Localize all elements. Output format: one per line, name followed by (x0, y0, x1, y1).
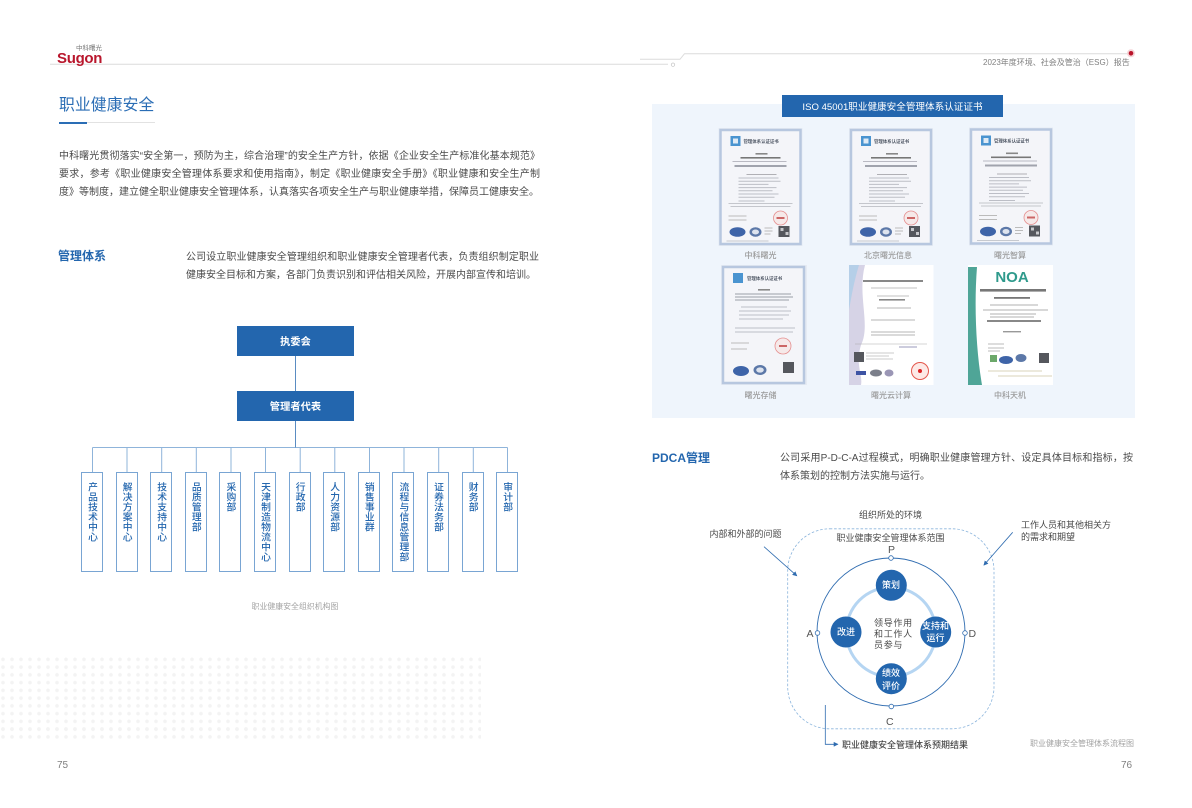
cert: 曙光云计算 (849, 265, 934, 385)
intro text (59, 150, 540, 198)
diagram labels: 和工作人 (874, 628, 913, 638)
panel: certificates: 曙光云计算 (871, 391, 911, 400)
cert labels: 中科曙光 (744, 251, 776, 260)
department boxes: 审计部 (501, 482, 512, 512)
box: 执委会 (237, 326, 354, 356)
department boxes (81, 472, 518, 572)
department boxes: 技术支持中心 (155, 482, 166, 542)
cert: 曙光存储 (721, 265, 807, 385)
diagram labels: 内部和外部的问题 (710, 529, 782, 539)
diagram labels: 领导作用 (874, 618, 913, 628)
cert: 曙光智算: 管理体系认证证书 (994, 138, 1030, 144)
diagram labels: 员参与 (874, 640, 903, 650)
cert labels: 北京曙光信息 (864, 251, 912, 260)
cert: 北京曙光信息 (849, 128, 933, 246)
diagram labels: 的需求和期望 (1021, 532, 1075, 542)
diagram labels: P (888, 544, 895, 556)
cert: 曙光智算 (969, 128, 1053, 246)
diagram labels: 绩效 (882, 668, 900, 678)
panel title bar (782, 95, 1003, 117)
department boxes: 天津制造物流中心 (259, 482, 270, 562)
intro text: 要求，参考《职业健康安全管理体系要求和使用指南》，制定《职业健康安全手册》《职业健康和安全生产制 (59, 169, 540, 180)
diagram labels: 组织所处的环境 (859, 510, 922, 520)
diagram labels: 职业健康安全管理体系预期结果 (842, 740, 968, 750)
department boxes: 产品技术中心 (86, 482, 97, 542)
panel: certificates (652, 95, 1135, 418)
diagram labels: 工作人员和其他相关方 (1021, 520, 1111, 530)
management system text: 健康安全目标和方案，各部门负责识别和评估相关风险，开展内部宣传和培训。 (186, 270, 536, 281)
department boxes: 财务部 (467, 482, 478, 512)
panel: certificates: 曙光存储 (744, 391, 776, 400)
box: 管理者代表 (237, 391, 354, 421)
management system text: 公司设立职业健康安全管理组织和职业健康安全管理者代表，负责组织制定职业 (186, 252, 539, 263)
intro text: 中科曙光贯彻落实“安全第一，预防为主，综合治理”的安全生产方针，依据《企业安全生产标准化基本规范》 (59, 151, 540, 162)
box: 执委会: 执委会 (280, 337, 311, 348)
cert labels: 曙光智算 (994, 251, 1026, 260)
PDCA text: 公司采用P-D-C-A过程模式，明确职业健康管理方针、设定具体目标和指标，按 (780, 453, 1133, 464)
section title: 职业健康安全 (59, 97, 154, 114)
panel title bar: ISO 45001职业健康安全管理体系认证证书 (802, 102, 983, 113)
diagram labels (710, 510, 1111, 750)
department boxes: 销售事业群 (363, 482, 374, 532)
cert labels (744, 251, 1026, 400)
page number 75: 75 (57, 760, 68, 771)
panel: certificates: 中科天机 (994, 391, 1026, 400)
intro text: 度》等制度，建立健全职业健康安全管理体系，认真落实各项安全生产与职业健康举措，保障员工健康安全。 (59, 187, 539, 198)
PDCA text: 体系策划的控制方法实施与运行。 (780, 471, 930, 482)
department boxes: 解决方案中心 (121, 482, 132, 542)
department boxes: 品质管理部 (190, 482, 201, 532)
logo: Sugon: Sugon (57, 50, 102, 66)
cert: 曙光存储: 管理体系认证证书 (747, 275, 783, 282)
heading: PDCA管理: PDCA管理 (652, 451, 710, 465)
diagram labels: 运行 (926, 633, 944, 643)
page number 76: 76 (1121, 760, 1132, 771)
diagram labels: C (886, 716, 894, 728)
management system text (186, 251, 539, 281)
department boxes: 行政部 (294, 482, 305, 512)
diagram labels: 评价 (882, 680, 900, 690)
heading: 管理体系: 管理体系 (58, 249, 106, 263)
diagram labels: 职业健康安全管理体系范围 (836, 533, 945, 543)
diagram labels: 改进 (837, 627, 855, 637)
department boxes: 人力资源部 (328, 482, 339, 532)
diagram labels: A (806, 628, 814, 640)
diagram labels: D (968, 628, 976, 640)
diagram labels: 支持和 (922, 621, 949, 631)
org chart caption: 职业健康安全组织机构图 (252, 602, 338, 611)
cert: 中科天机: NOA (995, 269, 1029, 286)
box: 管理者代表: 管理者代表 (270, 402, 321, 413)
PDCA text (780, 452, 1133, 482)
department boxes: 采购部 (224, 482, 235, 512)
PDCA caption: 职业健康安全管理体系流程图 (1030, 739, 1134, 748)
header report title: 2023年度环境、社会及管治（ESG）报告 (983, 58, 1130, 66)
PDCA diagram (710, 510, 1111, 750)
cert: 中科曙光: 管理体系认证证书 (744, 138, 779, 145)
department boxes: 证券法务部 (432, 482, 443, 532)
cert: 中科天机 (968, 265, 1053, 385)
cert: 中科曙光 (718, 128, 802, 246)
org chart (81, 326, 518, 572)
diagram labels: 策划 (882, 580, 900, 590)
cert: 北京曙光信息: 管理体系认证证书 (874, 138, 910, 145)
logo: Sugon: 中科曙光 (76, 45, 102, 52)
department boxes: 流程与信息管理部 (397, 482, 408, 562)
